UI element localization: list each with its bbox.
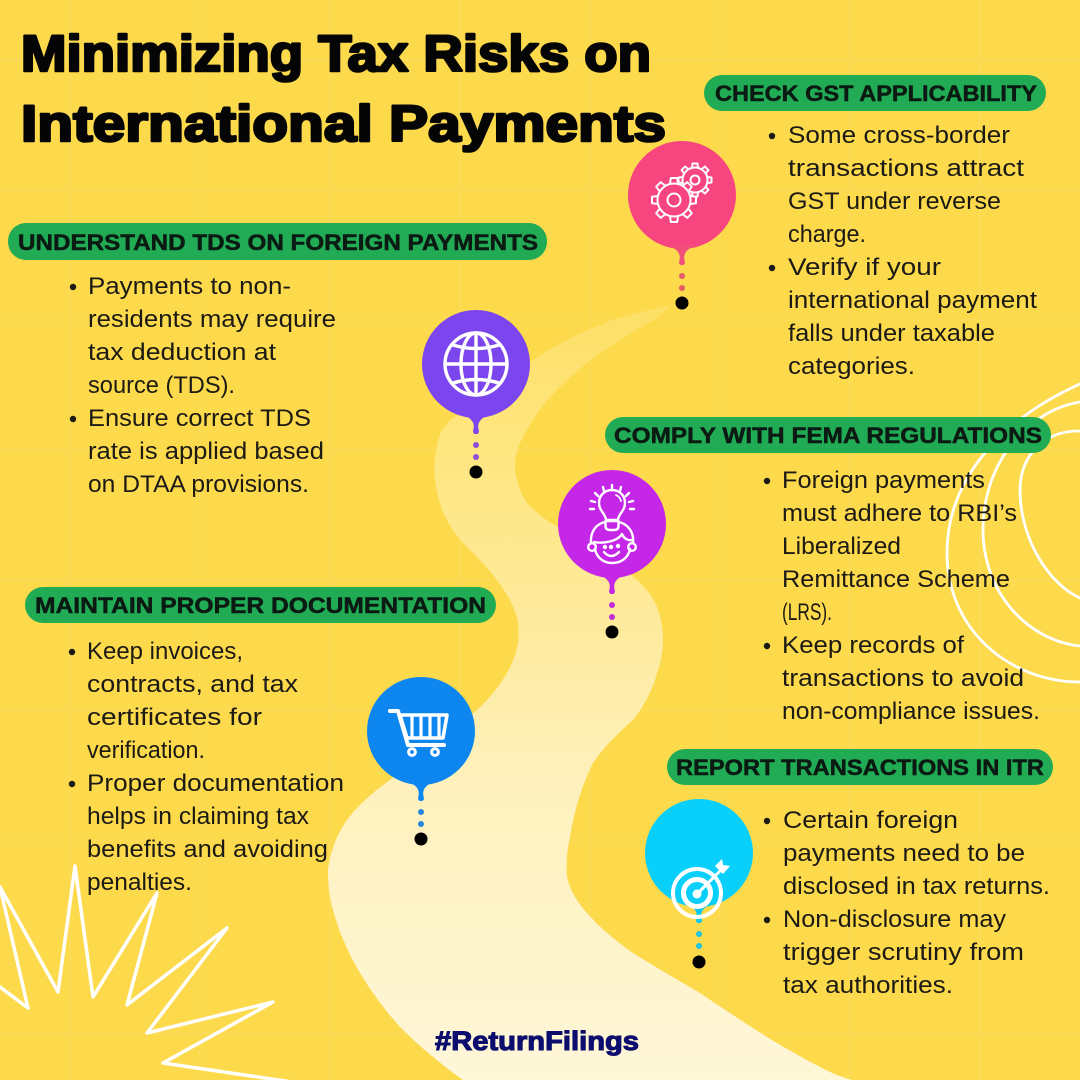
- footer hashtag: #ReturnFilings: [435, 1026, 639, 1056]
- text block: FEMA bullets: [764, 467, 1040, 725]
- panel: check GST applicability: [628, 75, 1046, 380]
- text block: ITR bullets: trigger scrutiny from: [783, 939, 1024, 966]
- title: [21, 25, 666, 152]
- text block: documentation bullets: [69, 638, 344, 896]
- text block: ITR bullets: tax authorities.: [783, 972, 953, 999]
- heading: check GST: CHECK GST APPLICABILITY: [715, 81, 1037, 106]
- heading: ITR: [667, 749, 1053, 785]
- heading: check GST: [704, 75, 1046, 111]
- text block: ITR bullets: Non-disclosure may: [783, 906, 1007, 933]
- text block: TDS bullets: tax deduction at: [88, 339, 276, 366]
- text block: documentation bullets: verification.: [87, 737, 205, 764]
- text block: ITR bullets: [764, 807, 1050, 999]
- text block: documentation bullets: benefits and avoiding: [87, 836, 328, 863]
- heading: TDS: [8, 223, 547, 260]
- text block: GST bullets: [769, 122, 1037, 380]
- heading: documentation: MAINTAIN PROPER DOCUMENTATION: [35, 593, 486, 618]
- text block: documentation bullets: Proper documentation: [87, 770, 344, 797]
- text block: TDS bullets: residents may require: [88, 306, 336, 333]
- icon: lightbulb head pin: [558, 470, 666, 638]
- text block: FEMA bullets: Foreign payments: [782, 467, 985, 494]
- title: Minimizing Tax Risks on: [21, 25, 651, 82]
- text block: GST bullets: falls under taxable: [788, 320, 995, 347]
- text block: FEMA bullets: (LRS).: [782, 599, 832, 626]
- decorative starburst: [0, 866, 292, 1080]
- text block: FEMA bullets: Liberalized: [782, 533, 901, 560]
- text block: TDS bullets: Ensure correct TDS: [88, 405, 311, 432]
- text block: GST bullets: categories.: [788, 353, 915, 380]
- heading: FEMA: COMPLY WITH FEMA REGULATIONS: [614, 423, 1042, 448]
- heading: TDS: UNDERSTAND TDS ON FOREIGN PAYMENTS: [18, 230, 538, 255]
- text block: ITR bullets: disclosed in tax returns.: [783, 873, 1050, 900]
- text block: GST bullets: GST under reverse: [788, 188, 1001, 215]
- panel: understand TDS: [8, 223, 547, 498]
- text block: documentation bullets: Keep invoices,: [87, 638, 243, 665]
- title: International Payments: [21, 95, 666, 152]
- text block: ITR bullets: Certain foreign: [783, 807, 958, 834]
- text block: FEMA bullets: must adhere to RBI’s: [782, 500, 1017, 527]
- decorative arcs: [947, 384, 1080, 682]
- text block: TDS bullets: on DTAA provisions.: [88, 471, 309, 498]
- text block: TDS bullets: Payments to non-: [88, 273, 291, 300]
- panel: maintain documentation: [25, 587, 496, 896]
- text block: documentation bullets: certificates for: [87, 704, 262, 731]
- text block: GST bullets: transactions attract: [788, 155, 1024, 182]
- heading: FEMA: [605, 417, 1051, 453]
- icon: gears pin: [628, 141, 736, 310]
- text block: TDS bullets: rate is applied based: [88, 438, 324, 465]
- text block: GST bullets: international payment: [788, 287, 1037, 314]
- text block: ITR bullets: payments need to be: [783, 840, 1025, 867]
- text block: FEMA bullets: non-compliance issues.: [782, 698, 1040, 725]
- icon: globe pin: [422, 310, 530, 478]
- icon: target pin: [645, 799, 753, 968]
- heading: documentation: [25, 587, 496, 623]
- text block: TDS bullets: [70, 273, 336, 498]
- text block: documentation bullets: helps in claiming tax: [87, 803, 309, 830]
- text block: documentation bullets: penalties.: [87, 869, 192, 896]
- panel: comply with FEMA: [558, 417, 1051, 725]
- text block: TDS bullets: source (TDS).: [88, 372, 235, 399]
- text block: documentation bullets: contracts, and tax: [87, 671, 298, 698]
- text block: GST bullets: Some cross-border: [788, 122, 1010, 149]
- panel: report in ITR: [645, 749, 1053, 999]
- heading: ITR: REPORT TRANSACTIONS IN ITR: [676, 755, 1044, 780]
- text block: FEMA bullets: Remittance Scheme: [782, 566, 1010, 593]
- icon: shopping cart pin: [367, 677, 475, 846]
- winding road: [328, 305, 852, 1080]
- text block: FEMA bullets: transactions to avoid: [782, 665, 1024, 692]
- text block: GST bullets: Verify if your: [788, 254, 941, 281]
- text block: GST bullets: charge.: [788, 221, 866, 248]
- text block: FEMA bullets: Keep records of: [782, 632, 964, 659]
